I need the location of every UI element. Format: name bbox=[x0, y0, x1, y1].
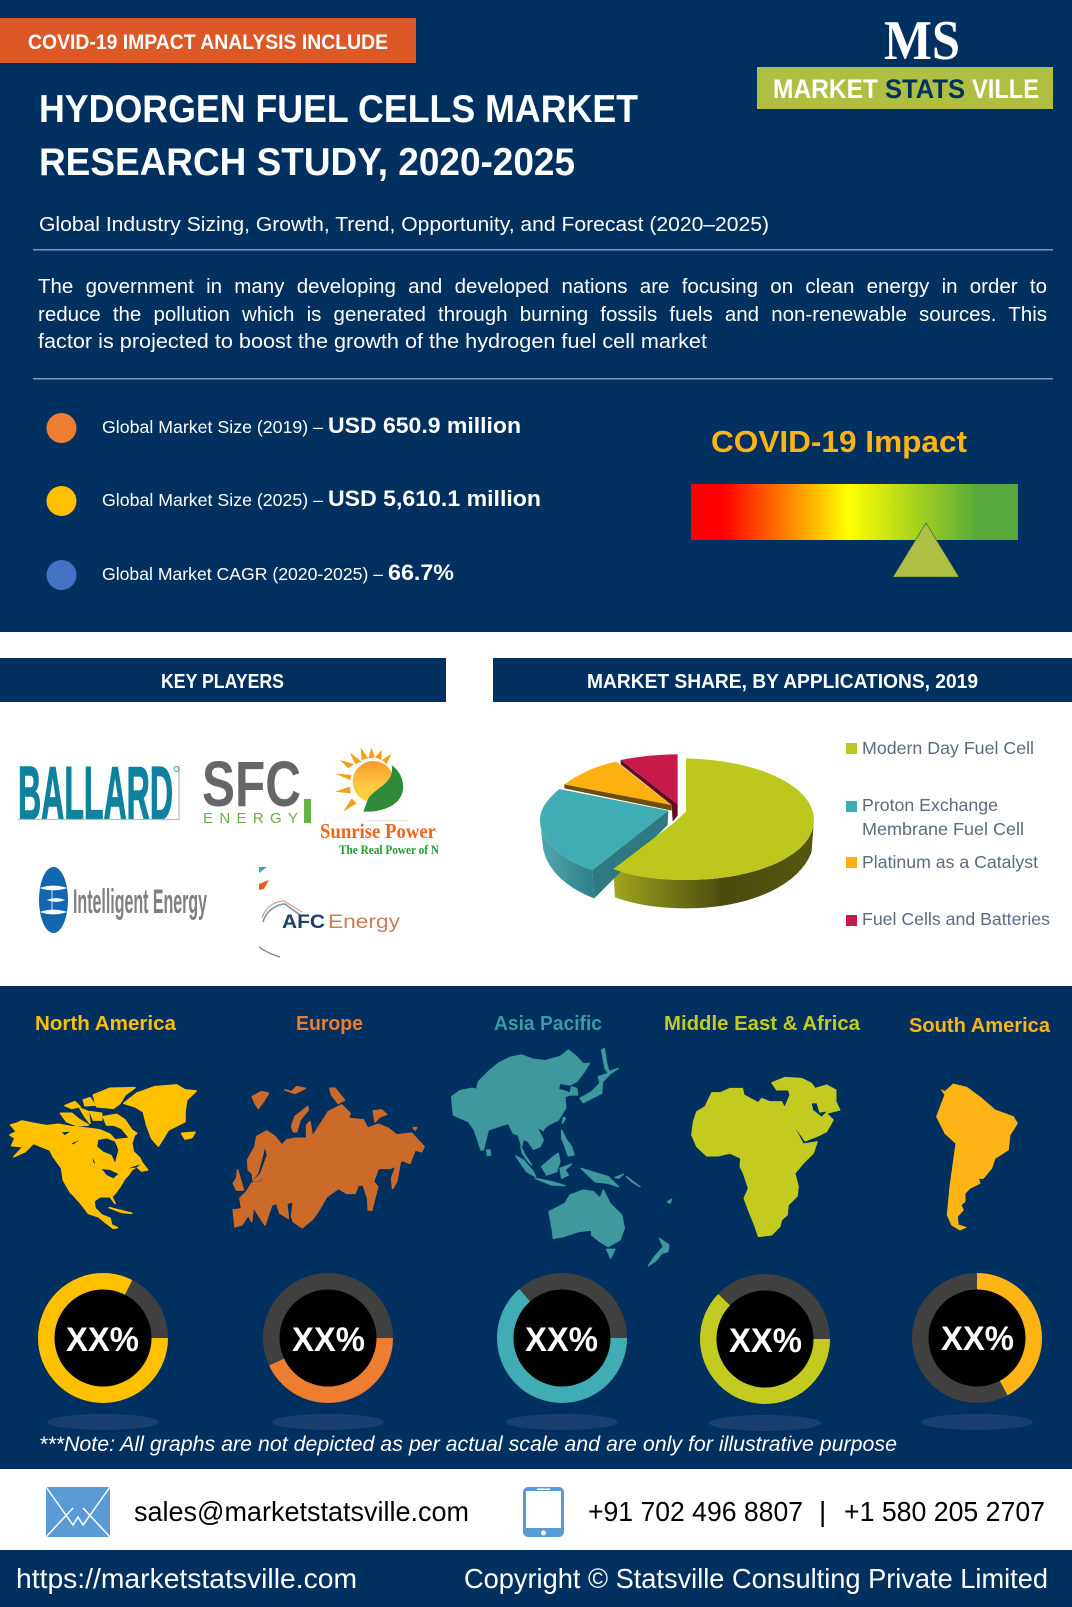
title: HYDORGEN FUEL CELLS MARKET bbox=[39, 88, 638, 131]
logo: SFC Energy: SFC bbox=[202, 748, 301, 820]
text: BALLARD bbox=[18, 751, 173, 835]
note: ***Note: All graphs are not depicted as per actual scale and are only for illustrative purpose bbox=[39, 1433, 897, 1456]
legend item: platinum: Platinum as a Catalyst bbox=[862, 852, 1038, 872]
legend item: modern day fuel cell: Modern Day Fuel Cell bbox=[862, 738, 1034, 758]
stat: market size 2025: Global Market Size (2025) – bbox=[102, 490, 323, 510]
covid impact gauge: COVID-19 Impact bbox=[711, 424, 967, 459]
map: Asia Pacific bbox=[452, 1048, 672, 1266]
map: North America bbox=[10, 1085, 196, 1228]
stat: CAGR bbox=[46, 560, 454, 590]
logo: Market Stats Ville: MARKET bbox=[773, 74, 878, 104]
heading: key players: KEY PLAYERS bbox=[161, 671, 284, 693]
icon: email envelope bbox=[46, 1487, 110, 1537]
heading: market share bbox=[493, 658, 1072, 702]
panel: regions bbox=[0, 986, 1072, 1469]
region label: South America: South America bbox=[909, 1015, 1051, 1037]
logo: Market Stats Ville bbox=[757, 10, 1053, 109]
intro paragraph: factor is projected to boost the growth of the hydrogen fuel cell market bbox=[38, 330, 707, 353]
panel: contact strip bbox=[0, 1470, 1072, 1550]
logo: Market Stats Ville: VILLE bbox=[972, 74, 1039, 104]
subtitle: Global Industry Sizing, Growth, Trend, Opportunity, and Forecast (2020–2025) bbox=[39, 213, 769, 236]
covid impact gauge bbox=[691, 424, 1018, 577]
phone numbers bbox=[588, 1496, 1045, 1527]
donut: Europe bbox=[272, 1282, 384, 1430]
donut: Asia Pacific bbox=[506, 1282, 618, 1430]
copyright: Copyright © Statsville Consulting Private Limited bbox=[464, 1563, 1048, 1594]
region label: Asia Pacific: Asia Pacific bbox=[494, 1013, 602, 1035]
title bbox=[39, 88, 638, 184]
logo: Market Stats Ville: STATS bbox=[885, 74, 965, 104]
donut: North America: XX% bbox=[66, 1321, 139, 1359]
map: Middle East and Africa bbox=[692, 1077, 840, 1237]
email address: sales@marketstatsville.com bbox=[134, 1496, 469, 1527]
intro paragraph bbox=[38, 273, 1047, 353]
heading: key players bbox=[0, 658, 446, 702]
map: South America bbox=[937, 1084, 1017, 1230]
stat: market size 2025: USD 5,610.1 million bbox=[328, 486, 541, 511]
title: RESEARCH STUDY, 2020-2025 bbox=[39, 141, 575, 184]
donut: North America bbox=[46, 1282, 160, 1430]
stat: CAGR: 66.7% bbox=[388, 560, 454, 585]
region label: Europe: Europe bbox=[296, 1013, 363, 1035]
logo: AFC Energy: Energy bbox=[328, 912, 401, 933]
logo: Sunrise Power: The Real Power of N bbox=[339, 842, 440, 857]
badge: covid analysis: COVID-19 IMPACT ANALYSIS INCLUDE bbox=[28, 31, 388, 54]
region label: Middle East and Africa: Middle East & Africa bbox=[664, 1013, 861, 1035]
donut: Europe: XX% bbox=[292, 1321, 365, 1359]
donut: South America bbox=[920, 1282, 1034, 1430]
donut: South America: XX% bbox=[941, 1320, 1014, 1358]
legend: applications bbox=[846, 738, 1050, 929]
stat: market size 2019: USD 650.9 million bbox=[328, 413, 521, 438]
intro paragraph: reduce the pollution which is generated through burning fossils fuels and non-renewable sources. This bbox=[38, 303, 1047, 326]
region label: North America: North America bbox=[35, 1013, 177, 1035]
logo: Ballard bbox=[18, 751, 179, 835]
panel: footer bbox=[0, 1550, 1072, 1607]
stat: market size 2019: Global Market Size (2019) – bbox=[102, 417, 323, 437]
pie chart: market share by applications bbox=[540, 754, 814, 908]
legend item: proton exchange: Proton Exchange bbox=[862, 795, 998, 815]
logo: SFC Energy: ENERGY bbox=[203, 810, 298, 827]
donut: Asia Pacific: XX% bbox=[525, 1321, 598, 1359]
panel: header and summary bbox=[0, 0, 1072, 632]
map: Europe bbox=[233, 1087, 424, 1228]
donut: Middle East and Africa bbox=[708, 1282, 822, 1431]
phone numbers: +1 580 205 2707 bbox=[844, 1496, 1045, 1527]
logo: Sunrise Power bbox=[320, 747, 440, 857]
donut: Middle East and Africa: XX% bbox=[729, 1322, 802, 1360]
logo: Intelligent Energy bbox=[39, 867, 207, 933]
heading: market share: MARKET SHARE, BY APPLICATIONS, 2019 bbox=[587, 671, 978, 693]
text: Intelligent Energy bbox=[73, 883, 207, 921]
legend item: fuel cells and batteries: Fuel Cells and Batteries bbox=[862, 909, 1050, 929]
intro paragraph: The government in many developing and developed nations are focusing on clean energy in order to bbox=[38, 275, 1047, 298]
logo: AFC Energy: AFC bbox=[282, 912, 325, 933]
legend item: proton exchange bbox=[846, 795, 1024, 839]
logo: Sunrise Power: Sunrise Power bbox=[320, 819, 436, 843]
icon: phone bbox=[523, 1487, 564, 1537]
legend item: proton exchange: Membrane Fuel Cell bbox=[862, 819, 1024, 839]
phone numbers: +91 702 496 8807 bbox=[588, 1496, 803, 1527]
phone numbers: | bbox=[819, 1496, 826, 1527]
stat: market size 2019 bbox=[46, 413, 521, 443]
logo: AFC Energy bbox=[259, 867, 401, 957]
website: https://marketstatsville.com bbox=[16, 1563, 357, 1594]
logo: Market Stats Ville: MS bbox=[884, 10, 960, 72]
badge: covid analysis bbox=[0, 18, 416, 63]
stat: market size 2025 bbox=[46, 486, 541, 516]
stat: CAGR: Global Market CAGR (2020-2025) – bbox=[102, 564, 383, 584]
